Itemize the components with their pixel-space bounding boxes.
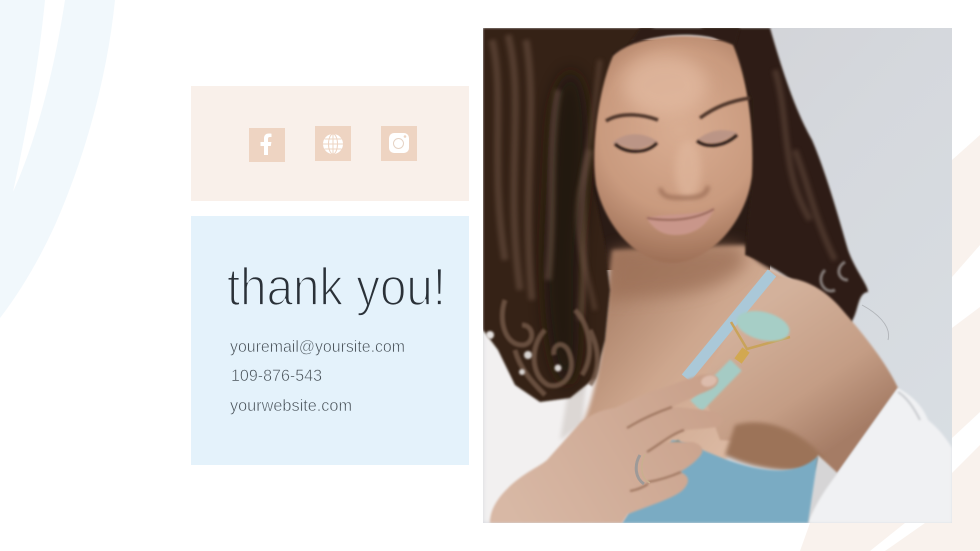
background swoosh: top-left blue [0,0,115,318]
icon: globe [315,126,351,161]
heading: thank you: thank you! [227,258,446,317]
hair: right mass [700,28,889,340]
text: email: youremail@yoursite.com [230,337,405,356]
hand [490,374,723,523]
eyebrows [606,115,658,121]
face [594,36,752,263]
white shirt left [483,325,600,523]
strap [686,273,772,378]
sleeve underlay [810,454,838,515]
text: phone: 109-876-543 [231,366,322,385]
arm and shoulder [700,278,898,478]
hair curls [502,300,598,395]
hair backing behind face [590,40,770,270]
photo: woman using jade roller [483,28,952,523]
nose [660,186,708,198]
hair: top fringe [632,28,741,40]
eyes [615,143,657,151]
panel: social icons [191,86,469,201]
jade roller [674,310,790,443]
eyelids [612,134,658,150]
white sleeve [808,388,952,523]
lips [648,212,712,236]
neck and chest [582,245,790,470]
hair: left mass [483,28,655,402]
icon: instagram [381,126,417,161]
text: website: yourwebsite.com [230,396,352,415]
blue top [622,440,818,523]
background stripes: right peach [800,135,980,551]
icon: facebook [249,128,285,162]
panel: thank you contact card [191,216,469,465]
